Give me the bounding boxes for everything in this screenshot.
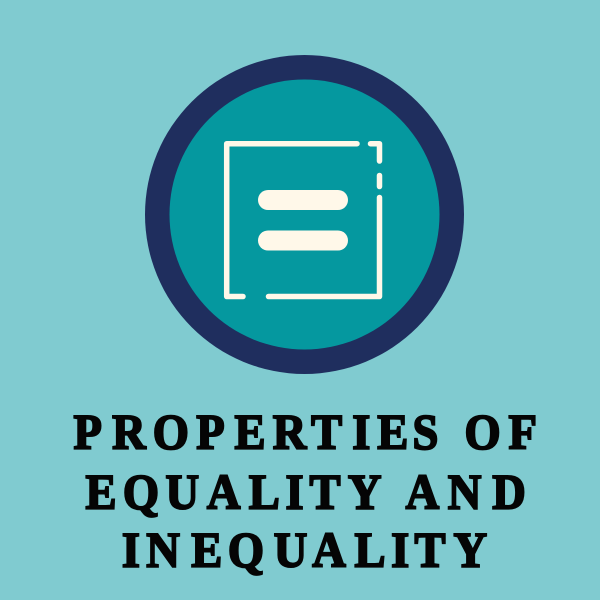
badge inner teal disc (170, 80, 440, 350)
title (74, 405, 537, 578)
icon: equals sign bars (258, 190, 348, 250)
title line 3: INEQUALITY (122, 523, 487, 578)
icon: dashed square outline (227, 144, 380, 296)
badge outer navy ring (145, 55, 464, 374)
title line 1: PROPERTIES OF (74, 405, 537, 460)
icon: equals sign in dashed square on circular badge (145, 55, 464, 374)
title line 2: EQUALITY AND (85, 465, 526, 520)
